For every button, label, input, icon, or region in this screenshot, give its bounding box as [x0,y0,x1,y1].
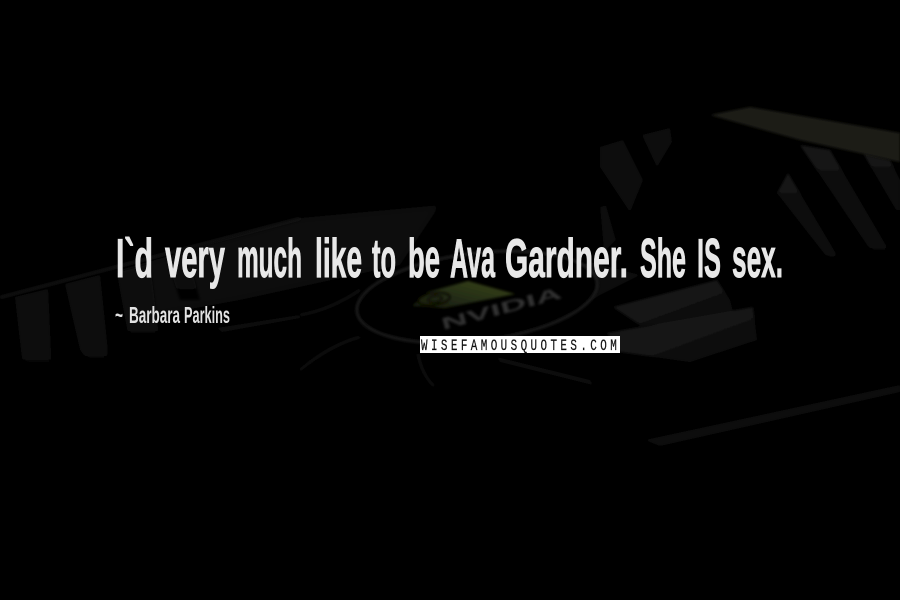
attribution: Barbara [129,302,180,328]
quote: to [372,227,396,289]
quote: IS [697,227,721,289]
quote: like [315,227,362,289]
quote [116,227,783,289]
attribution: Parkins [184,302,230,328]
heatsink fins, left [15,257,200,385]
heatsink fins, upper right [600,128,900,265]
photo: graphics card [0,107,900,446]
attribution: ~ [115,302,123,328]
source badge: WISEFAMOUSQUOTES.COM [421,338,617,356]
quote: Ava [450,227,495,289]
graphics card top band [120,205,440,320]
quote card: sex. [732,227,783,289]
fan blade lines [300,290,434,386]
nvidia logo [412,281,515,308]
quote: very [165,227,225,289]
quote: Gardner. [505,227,628,289]
quote: be [408,227,440,289]
quote: much [237,227,302,289]
card top rail [710,107,900,162]
fan hub ring [352,239,602,355]
nvidia wordmark: NVIDIA [439,283,564,334]
quote: She [640,227,686,289]
quote: I`d [116,227,153,289]
fan blades [217,262,900,446]
card edge line [0,217,300,299]
